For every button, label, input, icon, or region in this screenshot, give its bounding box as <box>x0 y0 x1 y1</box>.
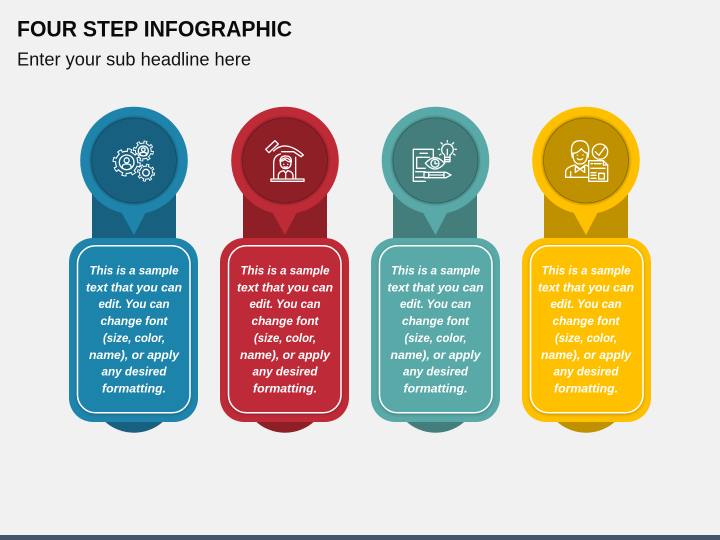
card text <box>388 264 484 396</box>
card <box>69 238 198 422</box>
card text: This is a sample <box>542 264 631 278</box>
card text: formatting. <box>404 382 468 396</box>
ring shading <box>382 107 489 214</box>
card text: change font <box>402 314 470 328</box>
connector column <box>92 190 176 240</box>
card text: change font <box>100 314 168 328</box>
badge pointer <box>271 210 298 235</box>
badge pointer <box>422 210 448 235</box>
card text: This is a sample <box>90 264 179 278</box>
card text: formatting. <box>554 382 618 396</box>
card text: edit. You can <box>550 297 622 311</box>
card text: any desired <box>403 365 468 379</box>
card text: (size, color, <box>254 331 316 345</box>
card <box>522 238 651 422</box>
card text: edit. You can <box>98 297 170 311</box>
connector column <box>393 190 477 240</box>
card text: name), or apply <box>240 348 331 362</box>
card text <box>86 264 182 396</box>
card text: edit. You can <box>250 297 321 311</box>
title: FOUR STEP INFOGRAPHIC <box>17 16 292 42</box>
card text: (size, color, <box>555 331 617 345</box>
connector column <box>243 190 327 240</box>
badge ring <box>231 107 339 214</box>
card text: name), or apply <box>390 348 482 362</box>
ring shading <box>231 107 339 214</box>
step 3: teal <box>371 107 500 433</box>
card text: change font <box>552 314 620 328</box>
card text: edit. You can <box>400 297 471 311</box>
icon: document, eye, pencil and light bulb <box>413 141 456 181</box>
card text: text that you can <box>237 280 333 294</box>
badge pointer <box>120 210 147 235</box>
badge ring <box>80 107 188 214</box>
badge pointer <box>572 210 599 235</box>
bottom tab <box>542 345 630 433</box>
card text <box>538 264 634 396</box>
card text: any desired <box>554 365 619 379</box>
card text: formatting. <box>102 382 166 396</box>
card text: any desired <box>252 365 318 379</box>
card text: text that you can <box>86 280 182 294</box>
card text: formatting. <box>253 382 317 396</box>
icon: person with checked document <box>566 141 608 181</box>
subtitle: Enter your sub headline here <box>17 50 251 70</box>
card text: name), or apply <box>89 348 180 362</box>
card text: name), or apply <box>541 348 632 362</box>
connector column <box>544 190 628 240</box>
card text: any desired <box>102 365 167 379</box>
icon: hand protecting person <box>266 141 304 181</box>
step 2: red <box>220 107 349 433</box>
card text <box>237 264 333 396</box>
card inner panel <box>380 246 492 413</box>
card <box>220 238 349 422</box>
card inner panel <box>530 246 643 413</box>
bottom tab <box>241 345 329 433</box>
badge ring <box>382 107 489 214</box>
card text: change font <box>252 314 319 328</box>
icon: gears with people <box>115 142 153 180</box>
badge centre <box>92 118 176 203</box>
ring shading <box>532 107 640 214</box>
step 1: blue <box>69 107 198 433</box>
bottom tab <box>90 345 178 433</box>
card inner panel <box>228 246 341 413</box>
card <box>371 238 500 422</box>
step 4: yellow <box>522 107 651 433</box>
badge centre <box>242 118 328 203</box>
card inner panel <box>78 246 190 413</box>
card text: (size, color, <box>103 331 165 345</box>
card text: This is a sample <box>391 264 480 278</box>
card text: text that you can <box>388 280 484 294</box>
card text: text that you can <box>538 280 634 294</box>
ring shading <box>80 107 188 214</box>
card text: This is a sample <box>240 264 330 278</box>
badge centre <box>544 118 628 203</box>
card text: (size, color, <box>404 331 466 345</box>
bottom tab <box>392 345 479 433</box>
bottom bar <box>0 535 720 540</box>
badge ring <box>532 107 640 214</box>
badge centre <box>393 118 478 203</box>
